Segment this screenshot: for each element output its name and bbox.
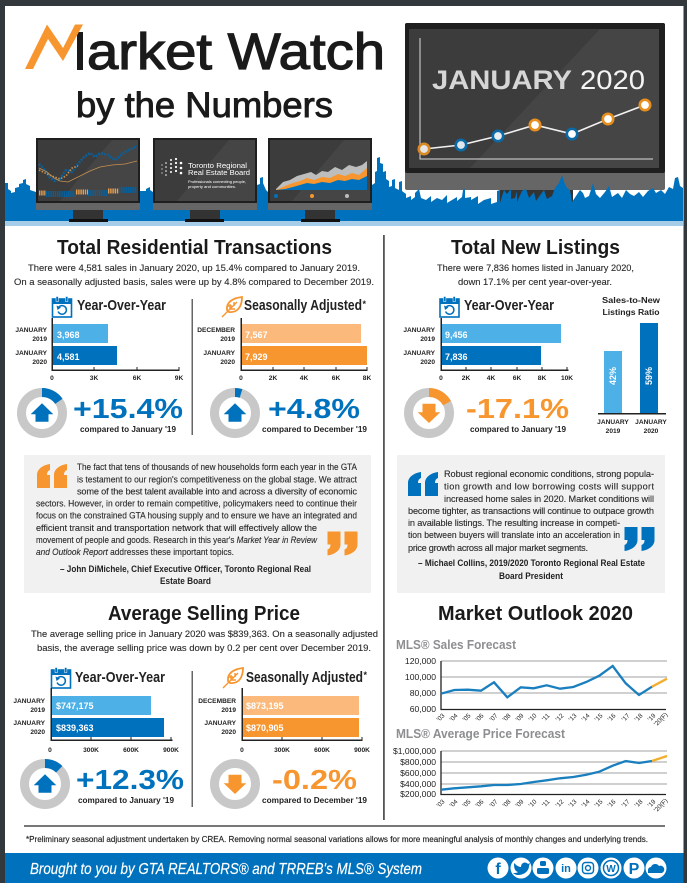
line chart: sales forecast: '06 (475, 712, 486, 723)
attribution: – John DiMichele, Chief Executive Officer, Toronto Regional Real (60, 564, 311, 574)
bar chart: sales year over year: JANUARY (15, 327, 48, 334)
monitor: January 2020: JANUARY (432, 65, 572, 95)
quote text: tion between buyers will translate into an acceleration in (408, 530, 620, 540)
bar chart: price seasonally adjusted: 900K (354, 747, 370, 754)
panel: Total New Listings (403, 237, 667, 435)
intro text (31, 629, 378, 654)
bar chart: price year over year: 900K (163, 747, 179, 754)
center divider (383, 235, 385, 820)
line chart: sales forecast: '09 (515, 712, 526, 723)
sub heading: Year-Over-Year (464, 297, 554, 314)
donut: +12.3% (24, 764, 66, 804)
callout: Michael Collins quote (397, 455, 665, 593)
line chart: sales forecast: '05 (462, 712, 473, 723)
bar chart: listings year over year: JANUARY (403, 350, 436, 357)
chart title: MLS® Average Price Forecast (396, 726, 566, 741)
bar chart: price year over year: 600K (123, 747, 139, 754)
sub heading: * (362, 299, 366, 309)
bar chart: price seasonally adjusted: $870,905 (246, 723, 284, 733)
monitor: TRREB logo: property and communities. (188, 185, 236, 189)
bar chart: sales seasonally adjusted: 2020 (220, 359, 235, 366)
icon: leaf (223, 668, 243, 688)
title: arket Watch (87, 23, 385, 80)
line chart: average price forecast: '15 (594, 798, 605, 809)
logo M (25, 24, 83, 70)
bar chart: sales-to-new listings ratio: 42% (608, 367, 618, 385)
intro text: basis, the average selling price was down by 0.2 per cent over December 2019. (37, 643, 371, 654)
line chart: sales forecast: 80,000 (410, 688, 436, 698)
attribution (60, 564, 311, 586)
quote text: some of the best talent available into and across a diversity of economic (77, 486, 357, 496)
monitor: TRREB logo: Toronto Regional (188, 163, 247, 170)
bar chart: price seasonally adjusted: $873,195 (246, 701, 284, 711)
line chart: sales forecast: '14 (581, 712, 592, 723)
title: by the Numbers (76, 86, 333, 125)
bar chart: listings year over year: 0 (439, 375, 443, 382)
line chart: average price forecast: '08 (502, 798, 513, 809)
bar chart: listings year over year: 6K (513, 375, 521, 382)
icon: closing quote (624, 527, 654, 551)
intro text: down 17.1% per cent year-over-year. (458, 277, 612, 288)
icon: opening quote (37, 464, 67, 488)
bar chart: listings year over year: 2019 (420, 336, 435, 343)
line chart: average price forecast: '06 (475, 798, 486, 809)
donut: -17.1% (408, 392, 450, 434)
bar chart: sales-to-new listings ratio: Listings Ratio (602, 307, 660, 317)
line chart: average price forecast: '12 (555, 798, 566, 809)
stat: -0.2%: compared to December '19 (262, 796, 368, 805)
sub heading: Year-Over-Year (75, 669, 165, 686)
stat: +12.3% (76, 764, 184, 805)
attribution: Estate Board (160, 576, 211, 586)
line chart: average price forecast: '18 (634, 798, 645, 809)
bar chart: listings year over year: 2020 (420, 359, 435, 366)
bar chart: sales year over year: 3,968 (57, 330, 80, 340)
intro text (437, 263, 634, 288)
bar chart: sales seasonally adjusted: JANUARY (203, 350, 236, 357)
quote text: The fact that tens of thousands of new households form each year in the GTA (77, 462, 358, 472)
line chart: average price forecast: '10 (528, 798, 539, 809)
line chart: average price forecast: '07 (489, 798, 500, 809)
line chart: average price forecast: '14 (581, 798, 592, 809)
bar chart: sales-to-new listings ratio (597, 295, 667, 435)
line chart: average price forecast: $600,000 (400, 768, 436, 778)
panel: Market Outlook 2020 (393, 603, 669, 814)
footnote: *Preliminary seasonal adjustment undertaken by CREA. Removing normal seasonal variations allows for more meaningful analysis of monthly changes and underlying trends. (26, 835, 648, 844)
line chart: sales forecast: '07 (489, 712, 500, 723)
bar chart: listings year over year: 4K (487, 375, 495, 382)
skyline base (5, 205, 683, 221)
bar chart: price seasonally adjusted: 2020 (221, 729, 236, 736)
bar chart: sales year over year: 6K (133, 375, 141, 382)
icons: social media: in (561, 863, 571, 875)
title (25, 23, 385, 125)
bar chart: sales-to-new listings ratio: JANUARY (597, 419, 629, 426)
bar chart: sales-to-new listings ratio: 2019 (606, 428, 621, 435)
monitor: TRREB logo (153, 138, 257, 222)
quote text: is testament to our region's competitiveness on the global stage. We attract (77, 474, 357, 484)
line chart: average price forecast: '03 (436, 798, 447, 809)
bar chart: sales seasonally adjusted: 2K (269, 375, 277, 382)
donut: +4.8% (214, 392, 256, 434)
icon: calendar (52, 296, 72, 317)
quote text: increased home sales in 2020. Market conditions will (444, 494, 654, 504)
intro text: There were 4,581 sales in January 2020, up 15.4% compared to January 2019. (28, 263, 360, 274)
quote text: efficient transit and transportation network that will effectively allow the (36, 523, 317, 533)
bar chart: listings year over year: JANUARY (403, 327, 436, 334)
icon: opening quote (408, 472, 438, 496)
sub heading: * (364, 670, 368, 680)
line chart: sales forecast: 120,000 (405, 656, 436, 666)
monitor: TRREB logo: Professionals connecting people, (188, 180, 246, 184)
bar chart: sales-to-new listings ratio: 59% (644, 367, 654, 385)
sub heading: Seasonally Adjusted (244, 297, 362, 314)
line chart: sales forecast: '04 (449, 712, 460, 723)
bar chart: sales seasonally adjusted: 0 (239, 375, 243, 382)
bar chart: price seasonally adjusted: DECEMBER (198, 698, 236, 705)
line chart: average price forecast (393, 746, 669, 814)
bar chart: sales-to-new listings ratio: 2020 (644, 428, 659, 435)
line chart: sales forecast: '17 (621, 712, 632, 723)
stat: -0.2% (262, 764, 368, 805)
bar chart: price year over year (13, 688, 179, 754)
bar chart: price year over year: 300K (83, 747, 99, 754)
bar chart: listings year over year: 2K (462, 375, 470, 382)
bar chart: listings year over year: 8K (538, 375, 546, 382)
line chart: average price forecast: '20(F) (653, 797, 669, 814)
stat: +12.3%: +12.3% (76, 764, 184, 795)
quote text: focus on the constrained GTA housing supply and to ensure we have an integrated and (36, 510, 357, 520)
stat: -0.2%: -0.2% (272, 764, 357, 795)
intro text (14, 263, 374, 288)
bar chart: sales seasonally adjusted: 6K (332, 375, 340, 382)
intro text: The average selling price in January 2020 was $839,363. On a seasonally adjusted (31, 629, 378, 640)
bar chart: listings year over year: 7,836 (445, 352, 468, 362)
quote text: tion growth and low borrowing costs will support (444, 482, 654, 492)
bar chart: price seasonally adjusted: JANUARY (204, 720, 237, 727)
bar chart: sales year over year: 9K (175, 375, 183, 382)
quote text: in available listings. The resulting increase in competi- (408, 518, 620, 528)
line chart: sales forecast: '10 (528, 712, 539, 723)
bar chart: price year over year: 2019 (30, 707, 45, 714)
bar chart: price year over year: 0 (48, 747, 52, 754)
monitor: candlestick chart (36, 138, 140, 222)
line chart: sales forecast: '11 (541, 712, 552, 723)
line chart: average price forecast: $400,000 (400, 779, 436, 789)
bar chart: price year over year: JANUARY (13, 720, 46, 727)
line chart: average price forecast: '19 (647, 798, 658, 809)
stat: +4.8%: compared to December '19 (262, 425, 368, 434)
donut: +15.4% (22, 392, 62, 434)
heading: Total Residential Transactions (57, 237, 332, 259)
line chart: average price forecast: '04 (449, 798, 460, 809)
line chart: sales forecast: '19 (647, 712, 658, 723)
attribution: – Michael Collins, 2019/2020 Toronto Regional Real Estate (418, 558, 645, 568)
bar chart: price year over year: $747,175 (56, 701, 94, 711)
intro text: There were 7,836 homes listed in January 2020, (437, 263, 634, 274)
stat: +15.4%: +15.4% (73, 393, 183, 424)
bar chart: sales seasonally adjusted: DECEMBER (197, 327, 235, 334)
callout: John DiMichele quote (24, 455, 371, 593)
quote text: Robust regional economic conditions, strong popula- (444, 469, 654, 479)
bar chart: sales-to-new listings ratio: Sales-to-New (602, 295, 660, 305)
panel: Average Selling Price (13, 603, 378, 807)
chart title: MLS® Sales Forecast (396, 637, 517, 652)
bar chart: sales year over year (15, 318, 183, 382)
footer text: Brought to you by GTA REALTORS® and TRREB's MLS® System (30, 861, 422, 878)
bar chart: sales-to-new listings ratio: JANUARY (635, 419, 667, 426)
panel: Total Residential Transactions (14, 237, 374, 435)
monitor: area chart (268, 138, 372, 222)
line chart: sales forecast: '15 (594, 712, 605, 723)
bar chart: price seasonally adjusted: 0 (240, 747, 244, 754)
bar chart: price seasonally adjusted (198, 688, 370, 754)
bar chart: listings year over year (403, 318, 573, 382)
icon: calendar (440, 296, 459, 317)
bar chart: price year over year: JANUARY (13, 698, 46, 705)
monitor: January 2020 (405, 23, 665, 204)
bar chart: sales year over year: 4,581 (57, 352, 80, 362)
line chart: average price forecast: '16 (607, 798, 618, 809)
icons: social media: P (629, 861, 640, 878)
line chart: average price forecast: $800,000 (400, 757, 436, 767)
quote text: price growth across all major market segments. (408, 543, 588, 553)
footer band (5, 853, 684, 883)
bar chart: price year over year: 2020 (30, 729, 45, 736)
bar chart: price seasonally adjusted: 300K (274, 747, 290, 754)
bar chart: sales year over year: 0 (50, 375, 54, 382)
line chart: average price forecast: '17 (621, 798, 632, 809)
quote text: movement of people and goods. Research in this year's Market Year in Review (36, 535, 318, 545)
line chart: sales forecast: 60,000 (410, 704, 436, 714)
line chart: average price forecast: $200,000 (400, 789, 436, 799)
attribution: Board President (499, 571, 563, 581)
line chart: sales forecast: '18 (634, 712, 645, 723)
bar chart: sales seasonally adjusted: 2019 (220, 336, 235, 343)
bar chart: sales seasonally adjusted (197, 318, 371, 382)
bar chart: price seasonally adjusted: 600K (314, 747, 330, 754)
bar chart: sales seasonally adjusted: 7,567 (245, 330, 268, 340)
line chart: sales forecast: '12 (555, 712, 566, 723)
icon: leaf (222, 297, 242, 317)
monitor: TRREB logo: Real Estate Board (188, 170, 250, 177)
stat: -17.1%: compared to January '19 (470, 425, 567, 434)
line chart: average price forecast: '13 (568, 798, 579, 809)
stat: +4.8% (262, 393, 368, 434)
heading: Average Selling Price (108, 603, 300, 625)
bar chart: listings year over year: 9,456 (445, 330, 468, 340)
bar chart: sales year over year: JANUARY (15, 350, 48, 357)
line chart: sales forecast: '03 (436, 712, 447, 723)
skyline (5, 157, 683, 222)
line chart: sales forecast: '08 (502, 712, 513, 723)
bar chart: sales seasonally adjusted: 7,929 (245, 352, 268, 362)
bar chart: sales seasonally adjusted: 8K (363, 375, 371, 382)
bar chart: sales year over year: 2020 (32, 359, 47, 366)
line chart: average price forecast: $1,000,000 (393, 746, 436, 756)
stat: +4.8%: +4.8% (268, 393, 360, 424)
icons: social media: f (495, 861, 501, 878)
heading: Market Outlook 2020 (438, 603, 633, 625)
line chart: sales forecast: '16 (607, 712, 618, 723)
icons: social media (488, 858, 666, 878)
stat: +15.4%: compared to January '19 (80, 425, 177, 434)
line chart: average price forecast: '11 (541, 798, 552, 809)
line chart: average price forecast: '05 (462, 798, 473, 809)
quote text: become tighter, as transactions will continue to outpace growth (408, 506, 654, 516)
bar chart: price year over year: $839,363 (56, 723, 94, 733)
bar chart: sales seasonally adjusted: 4K (300, 375, 308, 382)
line chart: sales forecast: '20(F) (653, 711, 669, 728)
skyline light strip (5, 221, 683, 226)
stat: +12.3%: compared to January '19 (78, 796, 175, 805)
bar chart: listings year over year: 10K (561, 375, 573, 382)
stat: -17.1% (466, 393, 569, 434)
line chart: sales forecast (405, 656, 669, 728)
icon: closing quote (328, 532, 358, 556)
line chart: average price forecast: '09 (515, 798, 526, 809)
quote text (408, 469, 654, 553)
bar chart: price seasonally adjusted: 2019 (221, 707, 236, 714)
icon: calendar (52, 668, 70, 688)
attribution (418, 558, 645, 581)
line chart: sales forecast: '13 (568, 712, 579, 723)
bar chart: sales year over year: 2019 (32, 336, 47, 343)
quote text: and Outlook Report addresses these important topics. (36, 547, 234, 557)
sub heading: Seasonally Adjusted (246, 669, 363, 686)
icons: social media: W (606, 864, 616, 875)
monitor: January 2020: 2020 (580, 65, 645, 95)
intro text: On a seasonally adjusted basis, sales were up by 4.8% compared to December 2019. (14, 277, 374, 288)
stat: -17.1%: -17.1% (466, 393, 569, 424)
bar chart: sales year over year: 3K (90, 375, 98, 382)
line chart: sales forecast: 100,000 (405, 672, 436, 682)
stat: +15.4% (73, 393, 183, 434)
quote text (36, 462, 358, 557)
sub heading: Year-Over-Year (77, 297, 166, 314)
quote text: sectors. However, in order to remain competitive, policymakers need to continue their (36, 498, 357, 508)
donut: -0.2% (214, 764, 256, 804)
heading: Total New Listings (451, 237, 620, 259)
